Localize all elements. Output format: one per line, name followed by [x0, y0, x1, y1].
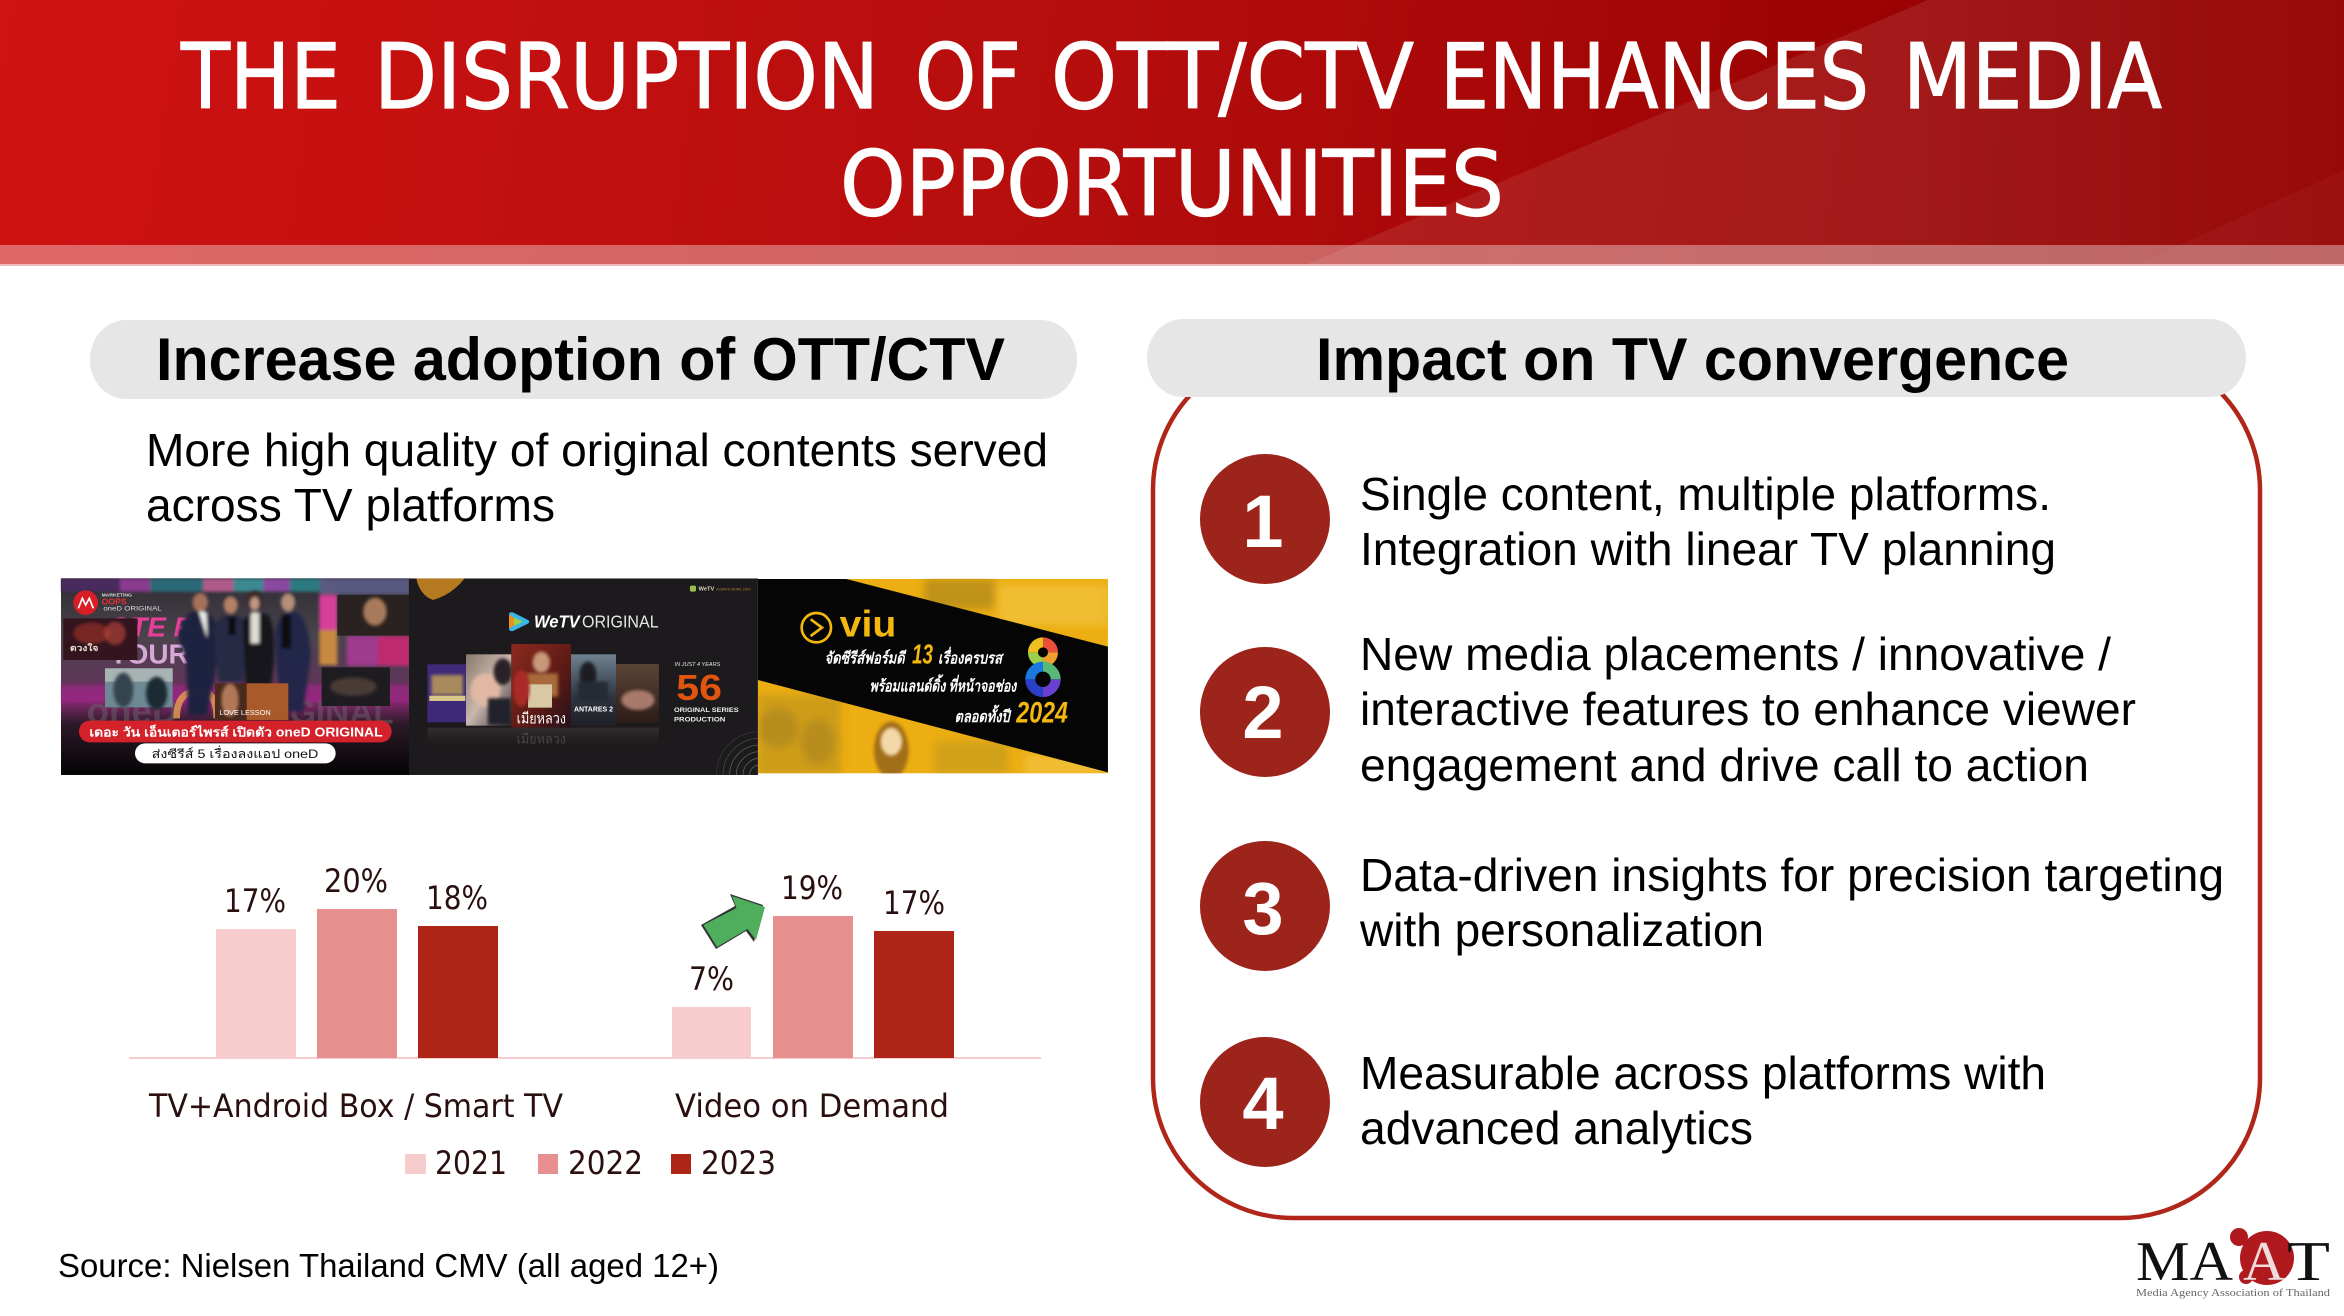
Thai headline: 2024	[1016, 697, 1068, 730]
legend: 2023	[701, 1144, 776, 1182]
item 1	[1200, 454, 2056, 584]
channel 8 logo	[1030, 642, 1056, 692]
image: oneD original: oneD	[87, 690, 178, 731]
posters: ดวงใจ	[70, 643, 98, 653]
WeTV logo: WeTV	[699, 587, 714, 593]
posters: LOVE LESSON	[219, 708, 271, 717]
category labels: TV+Android Box / Smart TV	[148, 1087, 563, 1125]
title	[180, 25, 2162, 237]
item 3: with personalization	[1359, 904, 1764, 956]
category labels: Video on Demand	[675, 1087, 949, 1125]
posters: ANTARES 2	[574, 707, 613, 714]
intro text	[146, 424, 1048, 531]
Thai headline: 13	[912, 638, 933, 669]
Thai headline: ตลอดทั้งปี	[955, 704, 1012, 726]
Thai headline	[826, 644, 1068, 723]
heading pill: impact on TV convergence: Impact on TV convergence	[1316, 326, 2069, 393]
value labels	[224, 862, 945, 998]
image: oneD original: TOUR	[110, 638, 189, 669]
Thai headline: พร้อมแลนด์ดิ้ง ที่หน้าจอช่อง	[870, 674, 1017, 696]
title: ENHANCES	[1440, 25, 1869, 130]
item 3: Data-driven insights for precision targeting	[1360, 849, 2224, 901]
stat: 56 original series: IN JUST 4 YEARS	[675, 662, 721, 668]
stat: 56 original series	[674, 662, 739, 724]
corner shield	[416, 578, 465, 600]
Thai headline: เรื่องครบรส	[938, 646, 1005, 667]
logo: MAAT: A	[2243, 1231, 2286, 1293]
heading pill: impact on TV convergence	[1147, 319, 2246, 397]
headline pill: เดอะ วัน เอ็นเตอร์ไพรส์ เปิดตัว oneD ORIGINAL	[89, 725, 383, 740]
bar chart	[129, 862, 1041, 1182]
value labels: 20%	[324, 862, 388, 900]
Thai headline: จัดซีรีส์ฟอร์มดี	[825, 648, 907, 667]
WeTV logo: ORIGINAL	[582, 612, 659, 632]
source note: Source: Nielsen Thailand CMV (all aged 12+)	[58, 1247, 719, 1284]
subheadline pill	[135, 743, 336, 763]
item 3: 3	[1242, 867, 1284, 950]
category labels	[148, 1087, 949, 1125]
Viu logo: viu	[840, 603, 896, 645]
subheadline pill: ส่งซีรีส์ 5 เรื่องลงแอป oneD	[152, 745, 319, 761]
logo: marketing oops: OOPS	[102, 596, 127, 606]
legend	[405, 1144, 776, 1182]
logo: MAAT: MA	[2136, 1231, 2234, 1293]
logo: MAAT: T	[2287, 1231, 2330, 1293]
intro text: across TV platforms	[146, 479, 555, 531]
image: oneD original	[61, 578, 410, 775]
Viu logo	[800, 610, 894, 644]
stat: 56 original series: 56	[676, 667, 722, 708]
intro text: More high quality of original contents served	[146, 424, 1048, 476]
value labels: 18%	[426, 879, 488, 917]
title: MEDIA	[1903, 25, 2162, 130]
item 2: interactive features to enhance viewer	[1360, 683, 2136, 735]
title: OTT/CTV	[1051, 25, 1414, 130]
image: Viu series	[758, 579, 1108, 778]
bars: TV + Android Box / Smart TV	[216, 909, 498, 1058]
value labels: 17%	[224, 882, 286, 920]
item 1: 1	[1242, 480, 1284, 563]
item 1: Integration with linear TV planning	[1360, 523, 2056, 575]
WeTV logo	[509, 586, 751, 632]
WeTV logo: ALWAYS MORE 2024	[716, 588, 751, 592]
title: THE	[180, 25, 341, 130]
title: DISRUPTION	[374, 25, 879, 130]
logo: MAAT	[2136, 1228, 2331, 1299]
item 2: 2	[1242, 671, 1284, 754]
stat: 56 original series: ORIGINAL SERIES	[674, 707, 739, 714]
posters	[63, 595, 409, 720]
heading pill: increase adoption: Increase adoption of OTT/CTV	[156, 326, 1005, 393]
logo: MAAT: Media Agency Association of Thailand	[2136, 1287, 2331, 1299]
logo: marketing oops	[73, 590, 162, 615]
icon: green growth arrow	[701, 894, 765, 949]
value labels: 19%	[781, 869, 843, 907]
item 4: Measurable across platforms with	[1360, 1047, 2046, 1099]
value labels: 17%	[883, 884, 945, 922]
people	[178, 591, 311, 715]
item 3	[1200, 841, 2224, 971]
WeTV logo: WeTV	[534, 612, 581, 632]
value labels: 7%	[689, 960, 734, 998]
stat: 56 original series: PRODUCTION	[674, 717, 726, 724]
panel: impact outline	[1153, 350, 2260, 1218]
item 4: 4	[1242, 1062, 1284, 1145]
axis line	[129, 1057, 1041, 1059]
title: OPPORTUNITIES	[840, 132, 1504, 237]
image: WeTV original	[409, 578, 758, 775]
image: oneD original: GINAL	[290, 694, 394, 731]
item 2: engagement and drive call to action	[1360, 739, 2089, 791]
legend: 2022	[568, 1144, 643, 1182]
item 4: advanced analytics	[1360, 1102, 1753, 1154]
bars: Video on Demand	[672, 916, 954, 1058]
item 2	[1200, 628, 2136, 791]
item 1: Single content, multiple platforms.	[1360, 468, 2051, 520]
image: oneD original: OTE F	[108, 612, 192, 643]
logo: marketing oops: MARKETING	[102, 593, 132, 599]
logo: marketing oops: oneD ORIGINAL	[103, 605, 162, 612]
header banner	[0, 0, 2344, 266]
legend: 2021	[435, 1144, 507, 1182]
item 4	[1200, 1037, 2046, 1167]
posters	[427, 644, 659, 751]
headline pill	[79, 721, 392, 742]
posters: เมียหลวง	[517, 731, 566, 746]
posters: เมียหลวง	[517, 710, 566, 727]
item 2: New media placements / innovative /	[1360, 628, 2111, 680]
title: OF	[915, 25, 1021, 130]
